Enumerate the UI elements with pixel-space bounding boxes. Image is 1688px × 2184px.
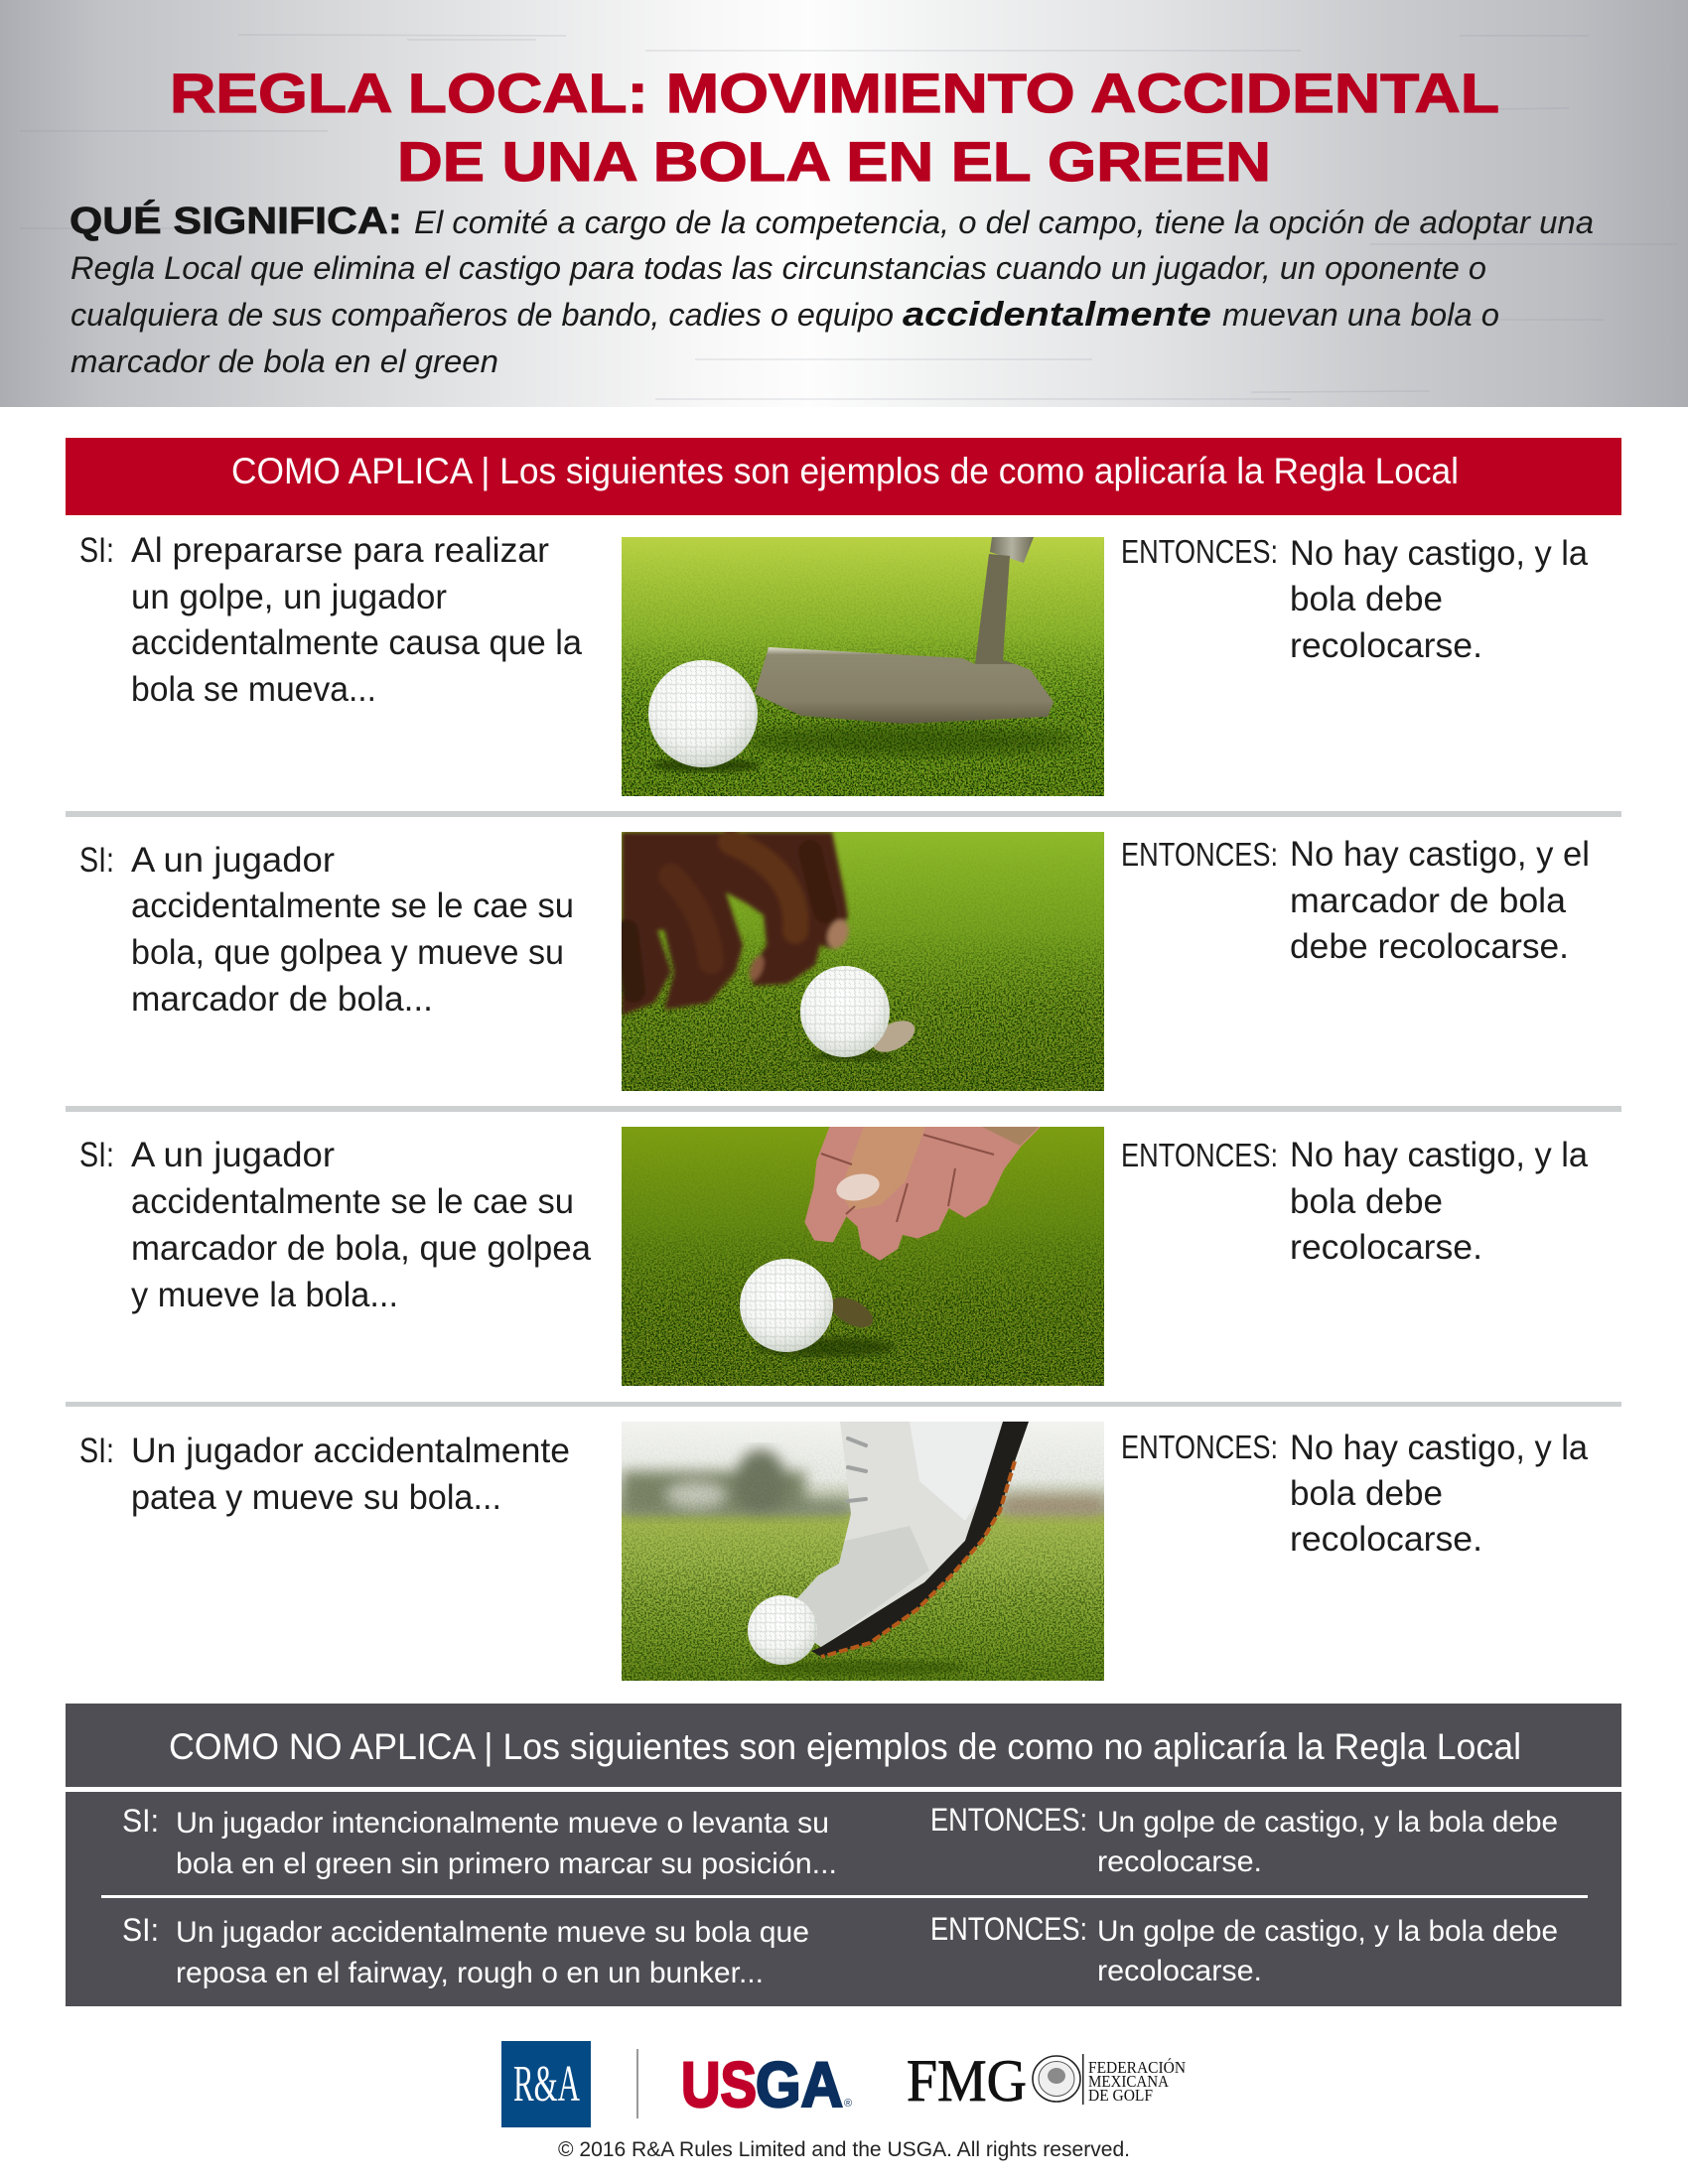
logo: R&A: R&A	[513, 2056, 580, 2113]
logo: USGA	[681, 2049, 852, 2120]
logo: R&A	[501, 2041, 591, 2127]
row 4 condition text: patea y mueve su bola...	[131, 1478, 501, 1517]
row 2 result text	[1121, 835, 1590, 966]
heading bar: como no aplica: COMO NO APLICA | Los siguientes son ejemplos de como no aplicaría la Regla Local	[169, 1726, 1521, 1767]
panel: como no aplica examples	[66, 1792, 1621, 2006]
row 3 condition text	[79, 1136, 592, 1314]
example 2: reposa en el fairway, rough o en un bunker...	[176, 1957, 764, 1989]
row 4 result text: No hay castigo, y la	[1290, 1429, 1589, 1467]
header panel: brushed metal	[0, 0, 1688, 407]
row 1 result text	[1121, 533, 1589, 665]
logo: USGA: GA	[756, 2049, 843, 2120]
heading bar: como aplica: COMO APLICA | Los siguientes son ejemplos de como aplicaría la Regla Local	[231, 451, 1459, 491]
row 1 condition text: Al prepararse para realizar	[131, 531, 549, 570]
title: REGLA LOCAL: MOVIMIENTO ACCIDENTAL	[170, 62, 1499, 124]
photo: hand dropping marker on ball	[622, 1127, 1104, 1386]
row 2 condition text	[79, 841, 574, 1019]
logo: USGA: US	[681, 2049, 757, 2120]
photo: dark hand dropping ball on marker	[622, 832, 1104, 1091]
row 1 result text: bola debe	[1290, 580, 1443, 618]
row 1 condition text: SI:	[79, 531, 114, 570]
example 1: SI:	[122, 1803, 159, 1839]
row 4 result text: ENTONCES:	[1121, 1429, 1278, 1465]
row 1 result text: ENTONCES:	[1121, 533, 1278, 570]
text block: qué significa: cualquiera de sus compañeros de bando, cadies o equipo	[70, 297, 894, 333]
example 2: ENTONCES:	[930, 1911, 1087, 1947]
row 2 condition text: bola, que golpea y mueve su	[131, 933, 564, 972]
row 4 result text: recolocarse.	[1290, 1520, 1482, 1559]
row 3 result text: No hay castigo, y la	[1290, 1136, 1589, 1174]
heading bar: como no aplica	[66, 1704, 1621, 1787]
row 4 condition text: SI:	[79, 1432, 114, 1470]
logo: FMG	[907, 2048, 1186, 2114]
example 2: recolocarse.	[1097, 1955, 1262, 1987]
row 3 result text: recolocarse.	[1290, 1228, 1482, 1267]
example 2: Un jugador accidentalmente mueve su bola que	[176, 1916, 809, 1949]
row 3 condition text: marcador de bola, que golpea	[131, 1229, 592, 1268]
row 2 condition text: marcador de bola...	[131, 980, 433, 1019]
example 1: bola en el green sin primero marcar su posición...	[176, 1847, 837, 1880]
row 2 result text: No hay castigo, y el	[1290, 835, 1590, 874]
text block: qué significa: El comité a cargo de la competencia, o del campo, tiene la opción de adoptar una	[414, 205, 1594, 240]
row 2 result text: marcador de bola	[1290, 882, 1567, 920]
photo: golf shoe kicking ball	[622, 1422, 1104, 1681]
example 2: SI:	[122, 1912, 159, 1948]
example 1: Un golpe de castigo, y la bola debe	[1097, 1806, 1558, 1839]
row 3 condition text: SI:	[79, 1136, 114, 1174]
text block: qué significa: Regla Local que elimina el castigo para todas las circunstancias cuando un jugador, un oponente o	[70, 250, 1486, 286]
row 1 condition text: bola se mueva...	[131, 670, 376, 709]
row 1 result text: recolocarse.	[1290, 626, 1482, 665]
row 4 result text	[1121, 1429, 1589, 1559]
logo: FMG: FEDERACIÓN	[1088, 2058, 1186, 2077]
text block: qué significa: marcador de bola en el green	[70, 343, 498, 379]
row 2 condition text: accidentalmente se le cae su	[131, 887, 574, 925]
example 2	[122, 1911, 1558, 1989]
row 1 result text: No hay castigo, y la	[1290, 534, 1589, 573]
title: DE UNA BOLA EN EL GREEN	[397, 130, 1271, 193]
copyright: © 2016 R&A Rules Limited and the USGA. All rights reserved.	[558, 2138, 1130, 2161]
row 1 condition text	[79, 531, 583, 709]
logo: USGA: ®	[844, 2098, 852, 2110]
row 2 condition text: A un jugador	[131, 841, 335, 880]
example 1: Un jugador intencionalmente mueve o levanta su	[176, 1807, 829, 1840]
example 1: recolocarse.	[1097, 1845, 1262, 1878]
text block: qué significa: muevan una bola o	[1222, 297, 1499, 333]
row 4 condition text: Un jugador accidentalmente	[131, 1432, 570, 1470]
text block: qué significa: accidentalmente	[903, 296, 1211, 334]
photo: putter and ball	[622, 537, 1104, 796]
row 1 condition text: un golpe, un jugador	[131, 578, 447, 616]
row 3 result text: bola debe	[1290, 1182, 1443, 1221]
example 1	[122, 1802, 1558, 1880]
row 2 result text: debe recolocarse.	[1290, 927, 1569, 966]
logo: FMG: MEXICANA	[1088, 2072, 1170, 2091]
row 2 condition text: SI:	[79, 841, 114, 880]
logo: FMG: DE GOLF	[1088, 2086, 1153, 2105]
row 4 result text: bola debe	[1290, 1474, 1443, 1513]
row 3 condition text: accidentalmente se le cae su	[131, 1182, 574, 1221]
row 4 condition text	[79, 1432, 570, 1517]
row 3 result text	[1121, 1136, 1589, 1267]
row 1 condition text: accidentalmente causa que la	[131, 623, 583, 662]
logo: FMG: FMG	[907, 2048, 1027, 2114]
row 2 result text: ENTONCES:	[1121, 836, 1278, 873]
example 2: Un golpe de castigo, y la bola debe	[1097, 1915, 1558, 1948]
text block: qué significa	[70, 199, 1594, 379]
row 3 condition text: A un jugador	[131, 1136, 335, 1174]
heading bar: como aplica	[66, 438, 1621, 515]
title	[170, 62, 1499, 193]
text block: qué significa: QUÉ SIGNIFICA:	[70, 199, 402, 242]
row 3 result text: ENTONCES:	[1121, 1137, 1278, 1173]
example 1: ENTONCES:	[930, 1802, 1087, 1838]
row 3 condition text: y mueve la bola...	[131, 1276, 398, 1314]
